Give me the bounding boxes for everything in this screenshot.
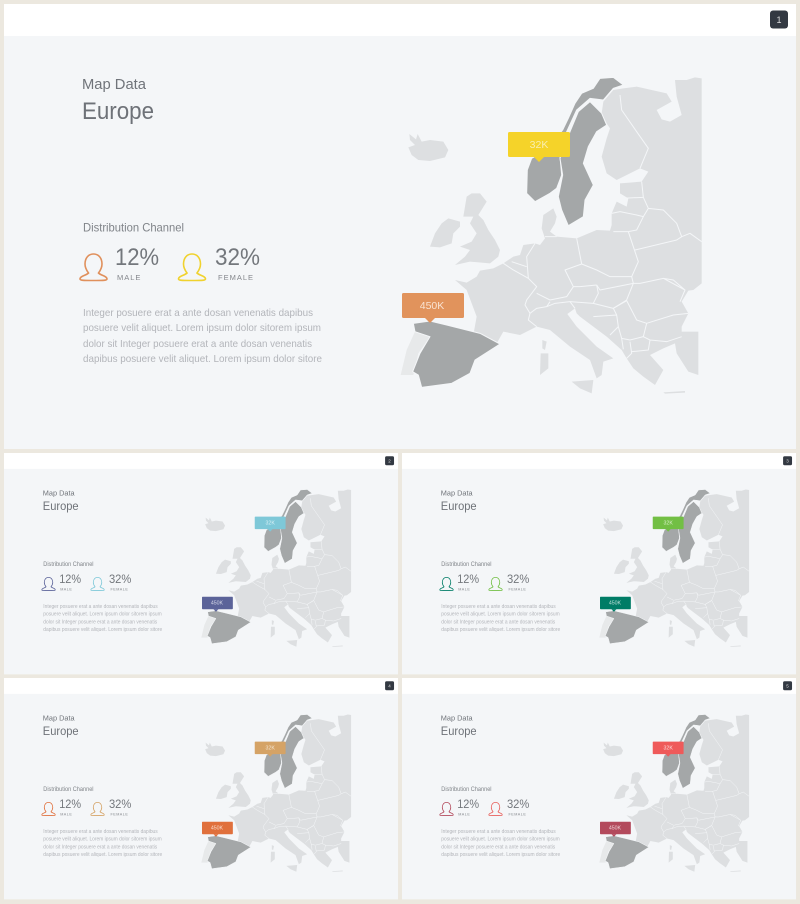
body text: dapibus posuere velit aliquet. Lorem ipsum dolor sitore	[441, 627, 560, 633]
body text: dapibus posuere velit aliquet. Lorem ipsum dolor sitore	[83, 353, 322, 365]
header bar	[4, 4, 796, 36]
stat: female: 32%	[507, 572, 530, 586]
body text: posuere velit aliquet. Lorem ipsum dolor sitorem ipsum	[441, 837, 560, 843]
slide 5: red variant	[402, 678, 796, 899]
stat: male: MALE	[60, 587, 72, 591]
map of Europe	[599, 489, 749, 647]
stat: male: MALE	[117, 273, 141, 282]
stat: female: FEMALE	[110, 812, 128, 816]
body text: dolor sit Integer posuere erat a ante dosan venenatis	[441, 620, 556, 626]
page badge	[783, 681, 792, 690]
icon: female	[489, 577, 502, 591]
callout: 32K	[255, 742, 286, 757]
stat: female: FEMALE	[218, 273, 254, 282]
icon: male	[42, 577, 55, 591]
stat: female: FEMALE	[508, 812, 526, 816]
stat: female: FEMALE	[508, 587, 526, 591]
map of Europe	[401, 77, 702, 394]
body text: posuere velit aliquet. Lorem ipsum dolor sitorem ipsum	[43, 612, 162, 618]
body text: Integer posuere erat a ante dosan venenatis dapibus	[43, 829, 158, 835]
stat: male: 12%	[59, 572, 81, 586]
map of Europe	[201, 489, 351, 647]
stat: male	[59, 572, 81, 591]
stat: male	[457, 797, 479, 816]
icon: female	[91, 802, 104, 816]
stat: female	[109, 797, 132, 816]
callout: 450K: 450K	[420, 300, 444, 312]
body text: Integer posuere erat a ante dosan venenatis dapibus	[83, 307, 313, 319]
callout: 32K: 32K	[530, 139, 548, 151]
page badge: 2	[388, 458, 391, 463]
section heading: Distribution Channel	[43, 562, 94, 568]
page badge	[385, 456, 394, 465]
body text: Integer posuere erat a ante dosan venenatis dapibus	[441, 829, 556, 835]
callout: 450K	[202, 822, 233, 837]
title: Europe	[441, 724, 477, 738]
map of Europe	[201, 714, 351, 872]
callout: 32K	[653, 517, 684, 532]
section heading: Distribution Channel	[83, 220, 184, 234]
title: Europe	[441, 499, 477, 513]
stat: female: 32%	[109, 797, 132, 811]
callout: 450K	[402, 293, 464, 323]
page badge: 4	[388, 683, 391, 688]
body text: dapibus posuere velit aliquet. Lorem ipsum dolor sitore	[43, 852, 162, 858]
page badge	[385, 681, 394, 690]
body text	[43, 829, 162, 858]
stat: male: MALE	[458, 587, 470, 591]
body text: dapibus posuere velit aliquet. Lorem ipsum dolor sitore	[43, 627, 162, 633]
stat: female: 32%	[507, 797, 530, 811]
callout: 32K: 32K	[664, 521, 673, 527]
body text	[43, 604, 162, 633]
body text: dolor sit Integer posuere erat a ante dosan venenatis	[43, 620, 158, 626]
callout: 32K	[255, 517, 286, 532]
callout: 450K: 450K	[211, 601, 224, 607]
icon: female	[91, 577, 104, 591]
section heading: Distribution Channel	[441, 562, 492, 568]
subtitle: Map Data	[43, 713, 75, 722]
callout: 450K	[202, 597, 233, 612]
section heading: Distribution Channel	[441, 787, 492, 793]
stat: female	[507, 797, 530, 816]
body text: dapibus posuere velit aliquet. Lorem ipsum dolor sitore	[441, 852, 560, 858]
body text: posuere velit aliquet. Lorem ipsum dolor sitorem ipsum	[43, 837, 162, 843]
body text	[83, 307, 322, 365]
icon: male	[80, 254, 107, 280]
icon: female	[489, 802, 502, 816]
page badge	[770, 10, 788, 28]
callout: 450K	[600, 822, 631, 837]
icon: male	[440, 577, 453, 591]
stat: female	[109, 572, 132, 591]
stat: male: MALE	[60, 812, 72, 816]
stat: male: 12%	[59, 797, 81, 811]
icon: male	[440, 802, 453, 816]
title: Europe	[43, 499, 79, 513]
stat: female: 32%	[215, 244, 260, 271]
page badge	[783, 456, 792, 465]
callout: 32K	[508, 132, 570, 162]
body text: posuere velit aliquet. Lorem ipsum dolor sitorem ipsum	[441, 612, 560, 618]
body text: dolor sit Integer posuere erat a ante dosan venenatis	[83, 338, 312, 350]
callout: 450K: 450K	[609, 826, 622, 832]
slide 2: blue variant	[4, 453, 398, 674]
slide 1: main slide	[4, 4, 796, 449]
title: Europe	[43, 724, 79, 738]
page badge: 3	[786, 458, 789, 463]
map of Europe	[599, 714, 749, 872]
stat: female	[507, 572, 530, 591]
stat: male	[115, 244, 159, 282]
icon: female	[178, 254, 206, 280]
stat: male: 12%	[457, 572, 479, 586]
slide 4: orange variant	[4, 678, 398, 899]
callout: 32K: 32K	[664, 746, 673, 752]
body text: dolor sit Integer posuere erat a ante dosan venenatis	[43, 845, 158, 851]
subtitle: Map Data	[43, 488, 75, 497]
body text: Integer posuere erat a ante dosan venenatis dapibus	[43, 604, 158, 610]
subtitle: Map Data	[82, 77, 147, 93]
callout: 450K	[600, 597, 631, 612]
body text	[441, 604, 560, 633]
callout: 32K	[653, 742, 684, 757]
stat: male: MALE	[458, 812, 470, 816]
callout: 450K: 450K	[211, 826, 224, 832]
stat: male	[59, 797, 81, 816]
subtitle: Map Data	[441, 488, 473, 497]
callout: 32K: 32K	[266, 746, 275, 752]
body text: posuere velit aliquet. Lorem ipsum dolor sitorem ipsum	[83, 322, 321, 334]
page badge: 5	[786, 683, 789, 688]
body text: dolor sit Integer posuere erat a ante dosan venenatis	[441, 845, 556, 851]
stat: female: 32%	[109, 572, 132, 586]
stat: male	[457, 572, 479, 591]
stat: male: 12%	[115, 244, 159, 271]
body text: Integer posuere erat a ante dosan venenatis dapibus	[441, 604, 556, 610]
stat: male: 12%	[457, 797, 479, 811]
section heading: Distribution Channel	[43, 787, 94, 793]
page badge: 1	[776, 15, 782, 25]
callout: 450K: 450K	[609, 601, 622, 607]
title: Europe	[82, 98, 154, 125]
callout: 32K: 32K	[266, 521, 275, 527]
icon: male	[42, 802, 55, 816]
body text	[441, 829, 560, 858]
slide 3: green variant	[402, 453, 796, 674]
subtitle: Map Data	[441, 713, 473, 722]
stat: female: FEMALE	[110, 587, 128, 591]
stat: female	[215, 244, 260, 282]
